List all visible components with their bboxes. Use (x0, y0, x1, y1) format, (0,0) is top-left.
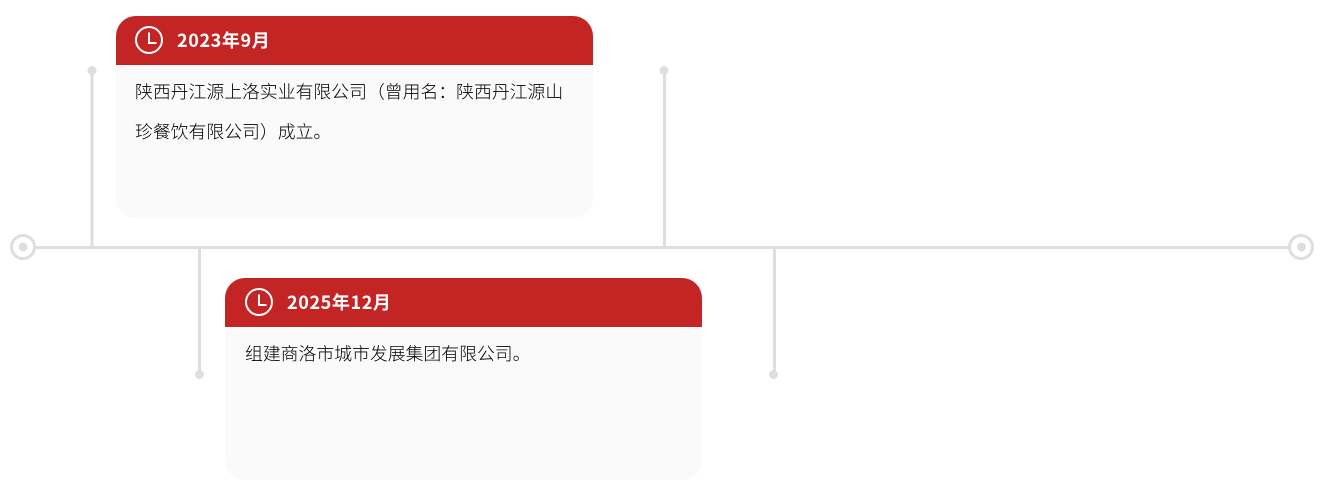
connector: lower empty (769, 247, 778, 379)
panel: 2023 event card (116, 16, 593, 218)
date heading: 2023年9月 (177, 27, 270, 53)
event text (135, 78, 563, 144)
card header: 2025 (225, 278, 702, 327)
end node (1290, 236, 1312, 258)
axis line (35, 246, 1290, 249)
event text: 陕西丹江源上洛实业有限公司（曾用名：陕西丹江源山 (135, 78, 563, 104)
card header: 2023 (116, 16, 593, 65)
icon: clock (135, 26, 163, 54)
event text: 珍餐饮有限公司）成立。 (135, 118, 331, 144)
connector: upper empty (660, 66, 668, 247)
connector: 2023 card (88, 66, 96, 247)
panel: 2025 event card (225, 278, 702, 480)
start node (12, 236, 34, 258)
connector: 2025 card (195, 247, 204, 379)
icon: clock (245, 288, 273, 316)
date heading: 2025年12月 (287, 289, 392, 315)
event text: 组建商洛市城市发展集团有限公司。 (245, 340, 530, 366)
